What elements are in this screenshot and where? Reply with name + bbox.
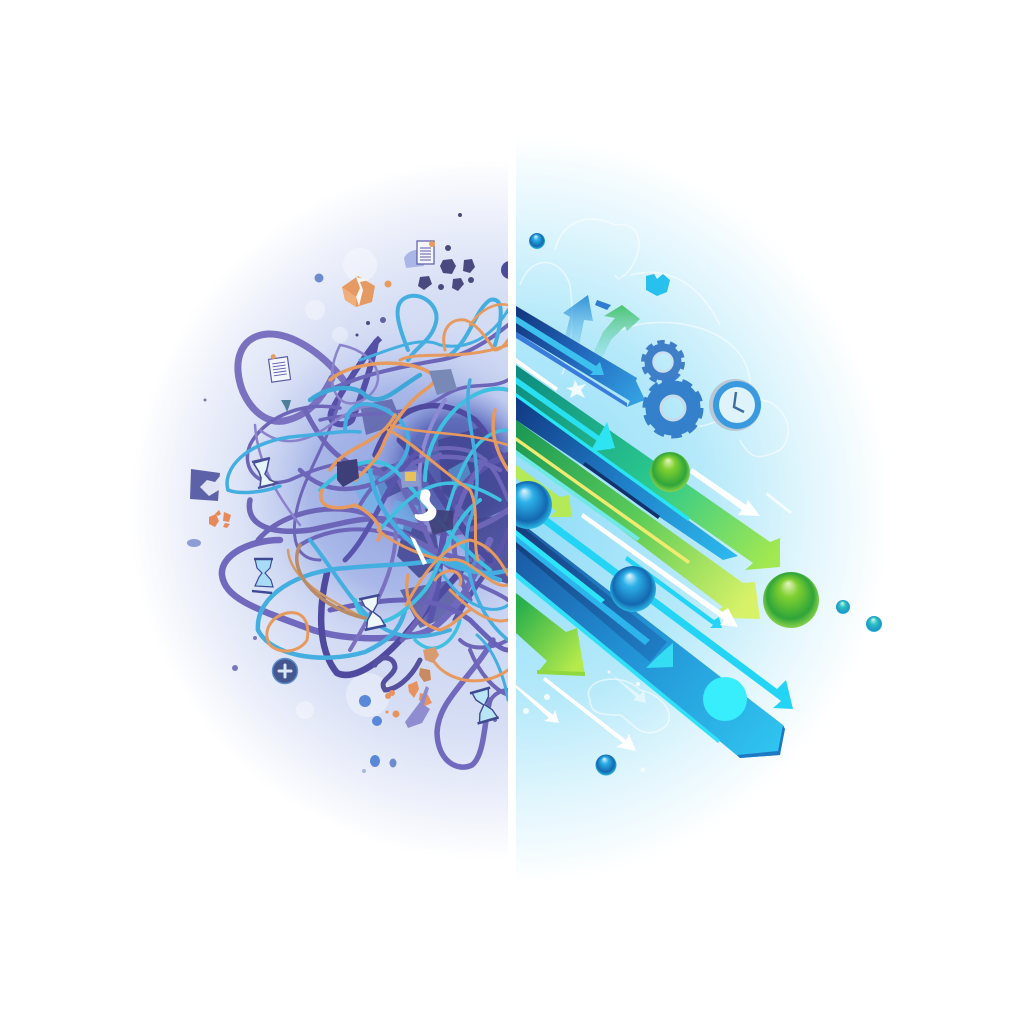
cyan edge of band C [516, 393, 690, 521]
icon: hourglass 1 [252, 458, 278, 488]
gray square chip [429, 369, 457, 395]
panel: streamlined flow (right) [516, 158, 882, 862]
up arrows [563, 295, 640, 357]
cyan edge of band D [516, 450, 640, 541]
icon: dark ball at edge [501, 261, 508, 279]
blue dots [204, 213, 462, 773]
purple fragment [405, 686, 430, 728]
sphere: small bottom [596, 754, 616, 776]
sphere: green large [763, 572, 819, 628]
pale circle on band F [703, 677, 747, 721]
grey chip [400, 470, 420, 488]
icon: hourglass 4 [469, 688, 499, 723]
icon: broken square [190, 469, 220, 501]
dark square chip [337, 459, 359, 487]
icon: floating dark fragments [356, 245, 475, 336]
sphere: blue left [504, 481, 552, 529]
white stripe [516, 358, 558, 391]
orange cluster bottom [385, 647, 439, 718]
arrow band F: main wide blue [516, 519, 783, 758]
tangle core [381, 392, 508, 546]
sphere: blue center [610, 566, 656, 612]
tangle: light blue fragments [350, 460, 484, 582]
icon: clock [709, 379, 761, 431]
white curled fragment [410, 489, 453, 565]
tangle: cyan strands [227, 296, 508, 700]
chip detail [405, 472, 416, 481]
sphere: green medium [650, 452, 690, 492]
dot [187, 539, 201, 547]
yellow stripe on band D [516, 437, 690, 564]
small lime arrow [516, 465, 572, 517]
arrow band D: green to yellow [516, 420, 760, 619]
white long arrow behind band B [690, 468, 792, 516]
icon: plus button [272, 658, 298, 684]
icon: document left [268, 352, 291, 382]
pale wash spots [296, 248, 390, 719]
cyan long arrow stripe [540, 514, 793, 709]
centre divider [508, 150, 516, 862]
small white sparks [523, 670, 646, 772]
sphere: teal right [866, 616, 882, 632]
icon: small cyan cube cluster [646, 274, 670, 296]
icon: document top [404, 241, 435, 268]
cyan glow [516, 158, 868, 862]
arrow band C: navy to blue [516, 396, 738, 560]
tangle: dark knots [360, 399, 508, 628]
band F shadow tip [737, 725, 785, 758]
tangle mid wash [263, 346, 508, 632]
arrow band A: navy to blue [516, 306, 645, 407]
lower lime arrow [516, 593, 585, 676]
icon: hourglass 2 [252, 559, 273, 593]
sphere: teal [836, 600, 850, 614]
tangle: purple strands [222, 325, 508, 767]
lower white arrows [516, 673, 646, 751]
white slim arrow [581, 513, 738, 627]
faint swirl lines [520, 219, 788, 733]
star [566, 380, 586, 398]
dark stripe with white line [579, 462, 660, 520]
icon: hourglass 3 [358, 595, 386, 630]
cyan stripes on band B [516, 377, 612, 450]
cyan arrowhead [590, 422, 615, 452]
icon: small gear [644, 343, 682, 381]
band F cyan edge [516, 572, 720, 743]
infographic canvas [155, 158, 882, 862]
icon: small funnel [281, 400, 291, 412]
cyan edge top of band E [516, 530, 605, 603]
tangle: orange strands [267, 304, 508, 681]
icon: cracked orange box [314, 274, 392, 307]
icon: orange fragments [209, 510, 231, 528]
icon: large gear [646, 381, 700, 435]
arrow band B: teal to green [516, 365, 780, 570]
sphere: small top [529, 233, 545, 249]
arrow band E: dark blue with cyan head [516, 522, 673, 668]
panel: tangled chaos (left) [155, 185, 508, 834]
lavender glow [155, 185, 508, 834]
